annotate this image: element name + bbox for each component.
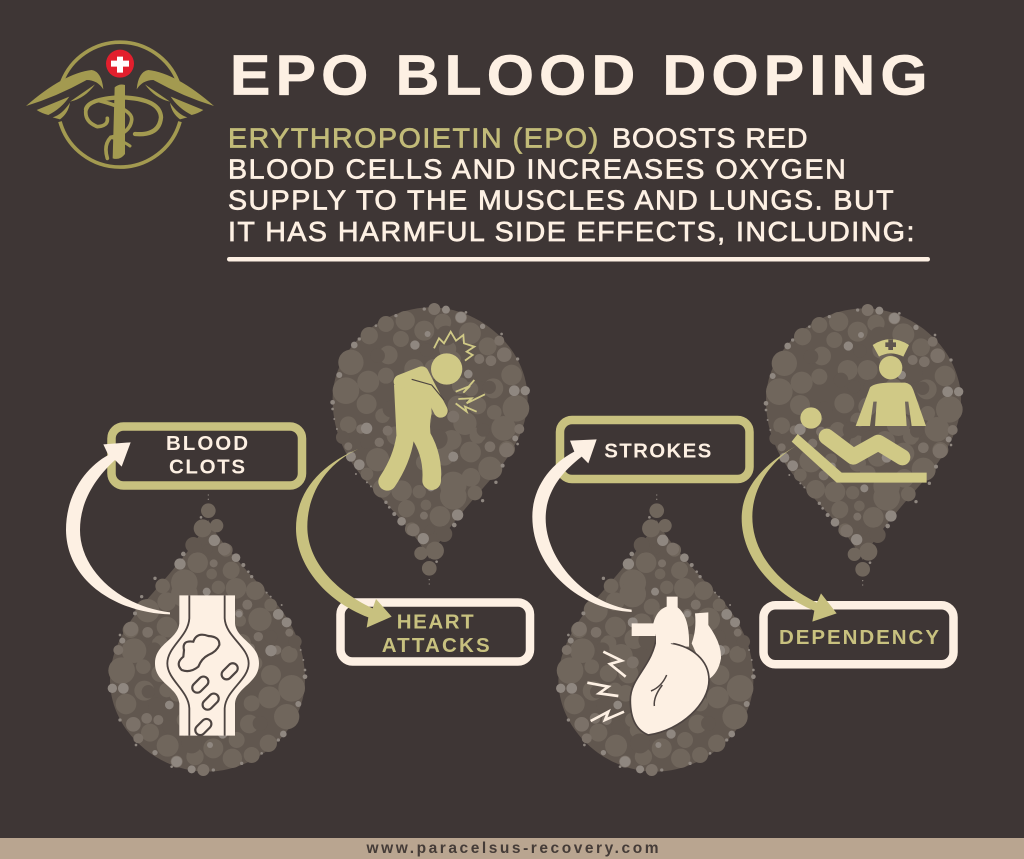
arrow: pin to heart attacks <box>296 449 392 628</box>
footer band <box>0 838 1024 859</box>
bubble drop: blood clots <box>108 494 307 776</box>
bubble pin: heart attacks <box>330 303 530 585</box>
nurse <box>856 339 926 426</box>
label box: blood clots <box>112 426 302 486</box>
label box: dependency: DEPENDENCY <box>779 626 939 649</box>
label box: blood clots: BLOOD <box>166 432 248 455</box>
icon: man clutching chest <box>387 332 485 482</box>
icon: heart with pain bolts <box>587 597 721 735</box>
arrow: drop to blood clots <box>66 442 170 614</box>
intro text block: IT HAS HARMFUL SIDE EFFECTS, INCLUDING: <box>228 216 914 247</box>
label box: heart attacks <box>340 602 530 662</box>
logo: winged staff emblem <box>26 42 214 167</box>
icon: nurse and patient <box>792 339 927 483</box>
footer band: www.paracelsus-recovery.com <box>366 840 658 857</box>
intro text block: SUPPLY TO THE MUSCLES AND LUNGS. BUT <box>228 185 894 215</box>
label box: heart attacks: ATTACKS <box>382 634 490 657</box>
arrow: pin to dependency <box>742 446 837 622</box>
title: EPO BLOOD DOPING <box>230 44 927 107</box>
label box: blood clots: CLOTS <box>169 455 245 478</box>
arrow: drop to strokes <box>532 439 632 612</box>
bubble pin: dependency <box>764 304 963 586</box>
label box: strokes <box>560 420 750 479</box>
icon: blood vessel with clots <box>155 595 259 737</box>
intro text block: BLOOD CELLS AND INCREASES OXYGEN <box>228 154 846 184</box>
intro text block <box>228 123 914 247</box>
label box: strokes: STROKES <box>604 440 711 462</box>
intro text block: ERYTHROPOIETIN (EPO) <box>228 123 598 153</box>
label box: dependency <box>764 605 954 664</box>
intro text block: BOOSTS RED <box>612 123 808 153</box>
bubble drop: strokes <box>556 494 756 776</box>
label box: heart attacks: HEART <box>397 610 474 633</box>
divider rule <box>227 257 930 262</box>
patient on bed <box>792 407 927 483</box>
